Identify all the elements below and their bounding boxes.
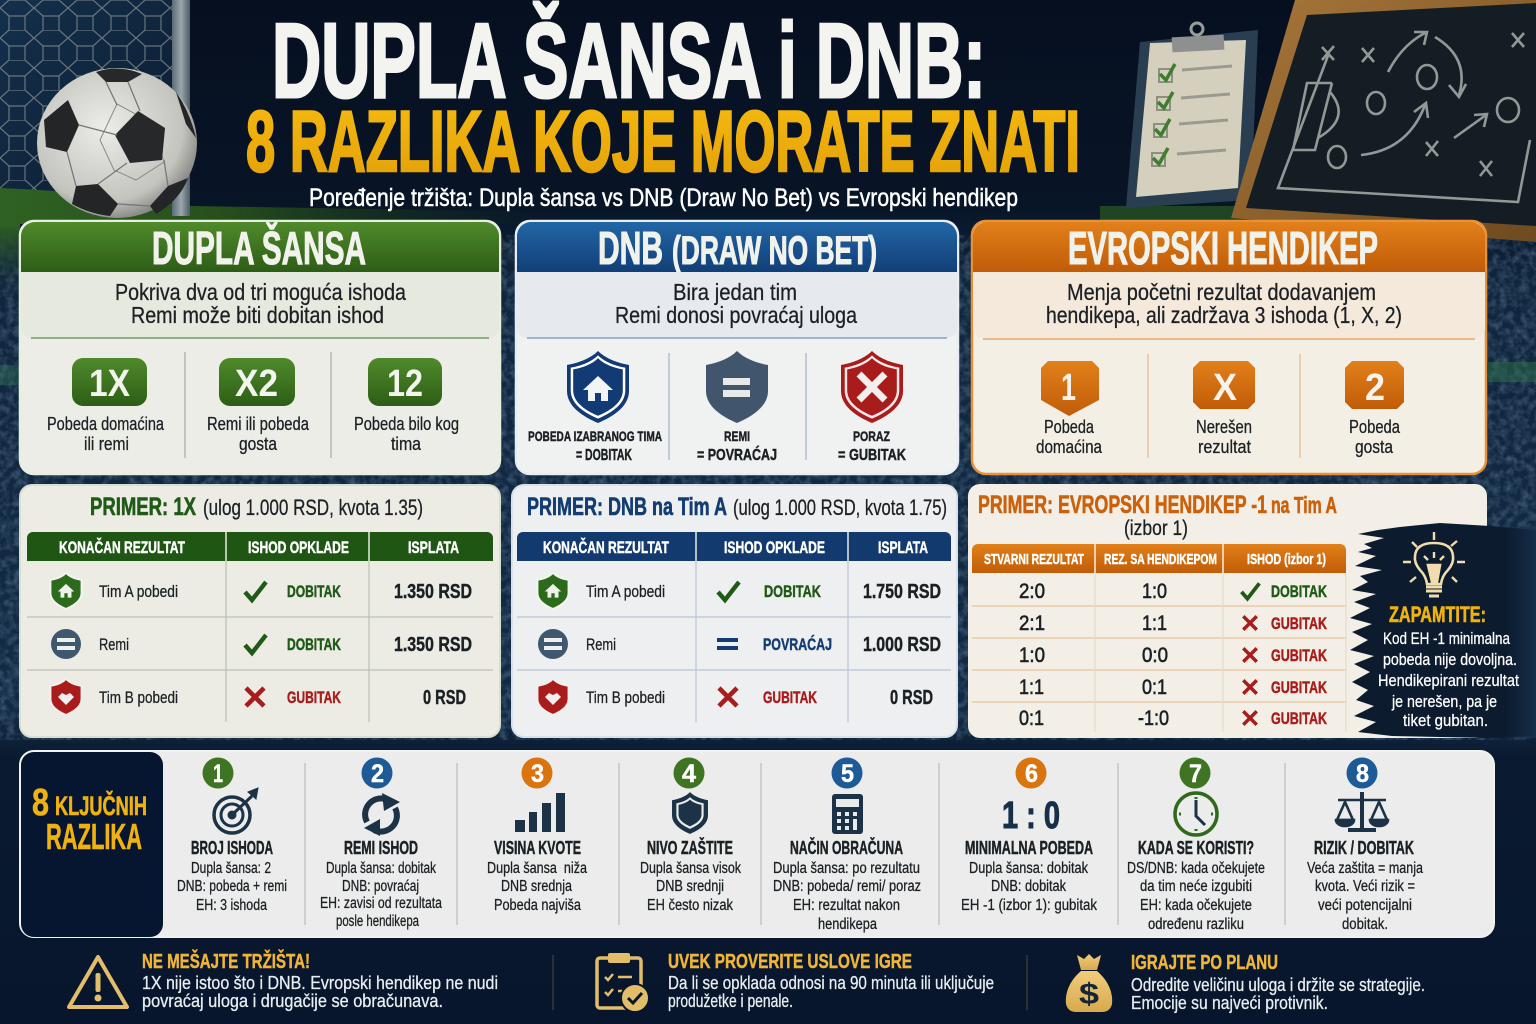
badge: 12 (354, 358, 459, 454)
heading: DNB: DNB (598, 222, 663, 274)
row: 0:1: 0:1 (1019, 707, 1044, 730)
table: example 1X: KONAČAN REZULTAT (59, 538, 185, 557)
table: example 1X: ISPLATA (408, 538, 459, 557)
row: Remi (51, 629, 472, 659)
item 1: broj ishoda (177, 758, 287, 914)
icon: draw shield (697, 351, 777, 464)
item 6: minimalna pobeda: MINIMALNA POBEDA (965, 838, 1093, 858)
panel: Evropski hendikep (972, 221, 1486, 474)
icon: target (214, 788, 258, 833)
footer tip: ne mešajte tržišta: NE MEŠAJTE TRŽIŠTA! (142, 949, 310, 973)
item 7: kada se koristi: da tim neće izgubiti (1140, 878, 1252, 895)
badge: 1X (47, 358, 165, 454)
footer tip: uvek proverite: Da li se opklada odnosi na 90 minuta ili uključuje (668, 973, 994, 993)
item 2: remi ishod: Dupla šansa: dobitak (326, 860, 436, 877)
badge: X2: Remi ili pobeda (207, 414, 310, 434)
item 6: minimalna pobeda: 6 (1025, 760, 1038, 788)
row: 1:0: 0:0 (1142, 644, 1168, 667)
title (246, 2, 1080, 190)
row: Tim B: Tim B pobedi (99, 688, 178, 707)
item 3: visina kvote (487, 758, 587, 914)
icon: soccer ball (37, 68, 197, 218)
badge: X2 (207, 358, 310, 454)
row: Remi: DOBITAK (287, 635, 342, 654)
row: 1:0: 1:0 (1019, 644, 1045, 667)
item 7: kada se koristi: EH: kada očekujete (1140, 897, 1252, 914)
footer tip: uvek proverite (597, 951, 994, 1012)
heading: example EH (978, 491, 1337, 540)
icon: draw shield: = POVRAĆAJ (697, 445, 777, 464)
row: Tim A: Tim A pobedi (586, 582, 665, 601)
icon: calculator (832, 794, 863, 834)
icon: loss shield (838, 351, 906, 464)
description: Remi donosi povraćaj uloga (615, 302, 857, 328)
item 5: način obračuna: EH: rezultat nakon (793, 897, 900, 914)
badge: 1X: 1X (89, 363, 131, 405)
item 1: broj ishoda: EH: 3 ishoda (196, 897, 267, 914)
panel: example 1X (20, 485, 500, 737)
badge: 2 (1345, 361, 1404, 457)
callout: Zapamtite (1350, 523, 1536, 738)
callout: Zapamtite: tiket gubitan. (1403, 711, 1488, 730)
row: 0:1 (1019, 707, 1328, 730)
row: Tim A: DOBITAK (287, 582, 342, 601)
description: Menja početni rezultat dodavanjem (1067, 279, 1376, 305)
table: example DNB: KONAČAN REZULTAT (543, 538, 669, 557)
row: Tim B: GUBITAK (763, 688, 818, 707)
row: Tim B (50, 678, 466, 716)
row: Tim A: Tim A pobedi (99, 582, 178, 601)
row: 1:1: 0:1 (1142, 676, 1167, 699)
description: Remi može biti dobitan ishod (131, 302, 384, 328)
item 8: rizik / dobitak: RIZIK / DOBITAK (1314, 838, 1414, 858)
item 3: visina kvote: DNB srednja (501, 878, 572, 895)
callout: Zapamtite: ZAPAMTITE: (1389, 602, 1486, 627)
item 6: minimalna pobeda: Dupla šansa: dobitak (969, 860, 1088, 877)
item 6: minimalna pobeda: EH -1 (izbor 1): gubitak (961, 897, 1097, 914)
heading block: 8 ključnih razlika (21, 752, 163, 937)
description: Pokriva dva od tri moguća ishoda (115, 279, 406, 305)
goal post (172, 0, 190, 216)
row: Tim A (50, 572, 472, 610)
item 7: kada se koristi: KADA SE KORISTI? (1138, 838, 1254, 858)
table: example EH: ISHOD (izbor 1) (1247, 551, 1326, 568)
description (517, 272, 957, 338)
item 3: visina kvote: 3 (531, 760, 544, 788)
item 8: rizik / dobitak: Veća zaštita = manja (1307, 860, 1423, 877)
heading: example 1X: (ulog 1.000 RSD, kvota 1.35) (203, 495, 423, 520)
item 1: broj ishoda: 1 (213, 760, 223, 788)
heading: example EH: (izbor 1) (1124, 517, 1188, 540)
item 4: nivo zaštite: DNB srednji (656, 878, 724, 895)
item 6: minimalna pobeda: DNB: dobitak (991, 878, 1066, 895)
heading block: 8 ključnih razlika: KLJUČNIH (55, 790, 147, 821)
row: Tim A: 1.350 RSD (394, 581, 472, 603)
item 2: remi ishod: posle hendikepa (336, 913, 419, 930)
row: Remi: Remi (99, 635, 129, 654)
item 7: kada se koristi: 7 (1189, 760, 1202, 788)
row: 2:0: 1:0 (1142, 580, 1167, 603)
heading: example DNB: (ulog 1.000 RSD, kvota 1.75) (733, 495, 947, 520)
row: Remi: 1.000 RSD (863, 634, 941, 656)
icon: loss shield: = GUBITAK (838, 447, 906, 464)
description: hendikepa, ali zadržava 3 ishoda (1, X, 2) (1046, 302, 1402, 328)
badge: X: Nerešen (1196, 417, 1252, 437)
item 5: način obračuna: NAČIN OBRAČUNA (790, 837, 903, 858)
badge: 1: Pobeda (1044, 417, 1095, 437)
badge: 1X: Pobeda domaćina (47, 414, 165, 434)
table: example DNB (517, 532, 951, 722)
item 2: remi ishod: EH: zavisi od rezultata (320, 895, 442, 912)
table: example 1X (27, 532, 493, 722)
item 7: kada se koristi: DS/DNB: kada očekujete (1127, 860, 1265, 877)
badge: 2: Pobeda (1349, 417, 1401, 437)
badge: 2: 2 (1365, 367, 1385, 409)
item 5: način obračuna: hendikepa (818, 916, 877, 933)
icon: tactics chalkboard (1231, 0, 1536, 242)
row: 1:1 (1019, 676, 1328, 699)
icon: refresh arrows (364, 793, 400, 836)
badge: 1: domaćina (1036, 437, 1103, 457)
item 8: rizik / dobitak: 8 (1356, 760, 1369, 788)
heading: example EH: na Tim A (1271, 492, 1337, 518)
row: Remi (538, 629, 941, 659)
badge: 2: gosta (1355, 437, 1394, 457)
row: 2:0: DOBITAK (1271, 582, 1328, 601)
icon: clipboard checklist (1126, 23, 1258, 208)
item 2: remi ishod: REMI ISHOD (344, 838, 418, 858)
item 1: broj ishoda: Dupla šansa: 2 (191, 860, 271, 877)
row: 2:1: 1:1 (1142, 612, 1167, 635)
icon: money bag: $ (1079, 978, 1099, 1011)
heading: Dupla šansa: DUPLA ŠANSA (152, 222, 366, 274)
heading: example DNB: PRIMER: DNB na Tim A (527, 493, 727, 521)
table: example DNB: ISPLATA (878, 538, 928, 557)
icon: home shield: = DOBITAK (576, 447, 632, 464)
row: Remi: Remi (586, 635, 616, 654)
badge: X: X (1213, 367, 1238, 409)
icon: money bag (1066, 954, 1112, 1012)
badge: 1X: ili remi (84, 434, 129, 454)
heading: DNB: (DRAW NO BET) (672, 229, 877, 273)
item 5: način obračuna: Dupla šansa: po rezultatu (773, 860, 920, 877)
icon: score 1:0: 1 : 0 (1002, 795, 1060, 837)
row: Tim A: DOBITAK (764, 582, 822, 601)
row: Tim B: Tim B pobedi (586, 688, 665, 707)
icon: signal bars (515, 793, 565, 832)
panel: example Evropski hendikep (968, 484, 1487, 738)
item 2: remi ishod: 2 (371, 760, 384, 788)
item 4: nivo zaštite: Dupla šansa visok (640, 860, 741, 877)
description: Bira jedan tim (673, 279, 797, 305)
panel: Dupla šansa (20, 221, 500, 474)
row: Tim B: 0 RSD (890, 687, 933, 709)
item 1: broj ishoda: DNB: pobeda + remi (177, 878, 287, 895)
row: 1:0: GUBITAK (1271, 646, 1328, 665)
badge: 1 (1036, 361, 1103, 457)
badge: X2: gosta (239, 434, 278, 454)
item 4: nivo zaštite: 4 (682, 760, 696, 788)
heading: example 1X: PRIMER: 1X (90, 493, 196, 521)
row: Tim B (537, 678, 933, 716)
badge: 12: Pobeda bilo kog (354, 414, 459, 434)
icon: shield (672, 792, 708, 834)
table: example 1X: ISHOD OPKLADE (248, 538, 349, 557)
item 4: nivo zaštite (640, 758, 741, 914)
footer tip: uvek proverite: UVEK PROVERITE USLOVE IGRE (668, 951, 912, 973)
row: 2:1: GUBITAK (1271, 614, 1328, 633)
panel: DNB (516, 221, 958, 474)
panel: example DNB (512, 485, 957, 737)
row: 1:1: GUBITAK (1271, 678, 1328, 697)
footer tip: igrajte po planu: Emocije su najveći protivnik. (1131, 993, 1328, 1013)
description (973, 272, 1485, 339)
item 5: način obračuna: 5 (841, 760, 854, 788)
heading: example DNB (527, 493, 947, 521)
row: Remi: POVRAĆAJ (763, 635, 832, 654)
icon: home shield: POBEDA IZABRANOG TIMA (528, 428, 662, 444)
item 1: broj ishoda: BROJ ISHODA (191, 838, 273, 858)
badge: X (1193, 361, 1255, 457)
footer tip: igrajte po planu: Odredite veličinu uloga i držite se strategije. (1131, 975, 1425, 995)
icon: warning triangle (69, 957, 127, 1007)
badge: 12: tima (391, 434, 422, 454)
subtitle: Poređenje tržišta: Dupla šansa vs DNB (Draw No Bet) vs Evropski hendikep (309, 184, 1018, 212)
badge: X: rezultat (1198, 437, 1251, 457)
icon: scales (1336, 792, 1388, 830)
row: 1:0 (1019, 644, 1328, 667)
row: 2:0 (1019, 580, 1328, 603)
item 8: rizik / dobitak: dobitak. (1342, 916, 1388, 933)
row: 2:0: 2:0 (1019, 580, 1045, 603)
footer tip: ne mešajte tržišta (69, 949, 498, 1011)
row: Remi: 1.350 RSD (394, 634, 472, 656)
item 6: minimalna pobeda (961, 758, 1097, 914)
heading: DNB (517, 222, 957, 274)
description (21, 272, 499, 338)
item 7: kada se koristi: određenu razliku (1148, 916, 1244, 933)
row: Tim A (537, 572, 941, 610)
item 8: rizik / dobitak (1307, 758, 1423, 933)
footer tip: igrajte po planu: IGRAJTE PO PLANU (1131, 952, 1278, 974)
row: 2:1 (1019, 612, 1328, 635)
footer tip: igrajte po planu (1066, 952, 1425, 1013)
icon: draw shield: REMI (724, 428, 750, 444)
panel: 8 key differences (20, 751, 1494, 937)
icon: loss shield: PORAZ (853, 428, 890, 444)
badge: 12: 12 (387, 363, 423, 405)
title: DUPLA ŠANSA i DNB: (272, 2, 986, 120)
item 8: rizik / dobitak: kvota. Veći rizik = (1315, 878, 1415, 895)
item 4: nivo zaštite: EH često nizak (647, 897, 733, 914)
footer tip: ne mešajte tržišta: povraćaj uloga i drugačije se obračunava. (142, 991, 443, 1011)
table: example DNB: ISHOD OPKLADE (724, 538, 825, 557)
callout: Zapamtite: je nerešen, pa je (1391, 692, 1497, 711)
item 5: način obračuna (773, 758, 921, 933)
icon: home shield (528, 351, 662, 464)
item 3: visina kvote: Dupla šansa niža (487, 860, 587, 877)
table: example EH (972, 544, 1346, 732)
table: example EH: REZ. SA HENDIKEPOM (1104, 551, 1217, 568)
heading block: 8 ključnih razlika: RAZLIKA (46, 816, 142, 857)
item 3: visina kvote: VISINA KVOTE (494, 838, 581, 858)
row: Tim A: 1.750 RSD (863, 581, 941, 603)
heading: example EH: PRIMER: EVROPSKI HENDIKEP -1 (978, 491, 1267, 519)
row: 1:1: 1:1 (1019, 676, 1044, 699)
item 8: rizik / dobitak: veći potencijalni (1318, 897, 1412, 914)
item 7: kada se koristi (1127, 758, 1265, 933)
heading: Dupla šansa (21, 222, 499, 274)
badge: X2: X2 (235, 363, 278, 405)
item 2: remi ishod (320, 758, 442, 930)
footer tip: ne mešajte tržišta: 1X nije istoo što i DNB. Evropski hendikep ne nudi (142, 973, 498, 993)
table: example EH: STVARNI REZULTAT (984, 551, 1084, 568)
item 4: nivo zaštite: NIVO ZAŠTITE (647, 837, 733, 858)
footer tip: uvek proverite: produžetke i penale. (668, 991, 793, 1011)
row: Tim B: 0 RSD (423, 687, 466, 709)
row: 0:1: GUBITAK (1271, 709, 1328, 728)
row: Tim B: GUBITAK (287, 688, 342, 707)
heading block: 8 ključnih razlika: 8 (32, 782, 49, 824)
badge: 1: 1 (1061, 367, 1076, 409)
row: 2:1: 2:1 (1019, 612, 1045, 635)
icon: clipboard check (597, 953, 649, 1012)
item 3: visina kvote: Pobeda najviša (494, 897, 581, 914)
item 2: remi ishod: DNB: povraćaj (342, 878, 419, 895)
icon: light bulb (1403, 532, 1465, 596)
row: 0:1: -1:0 (1138, 707, 1169, 730)
heading: example 1X (90, 493, 423, 521)
item 5: način obračuna: DNB: pobeda/ remi/ poraz (773, 878, 921, 895)
icon: clock (1175, 793, 1217, 835)
